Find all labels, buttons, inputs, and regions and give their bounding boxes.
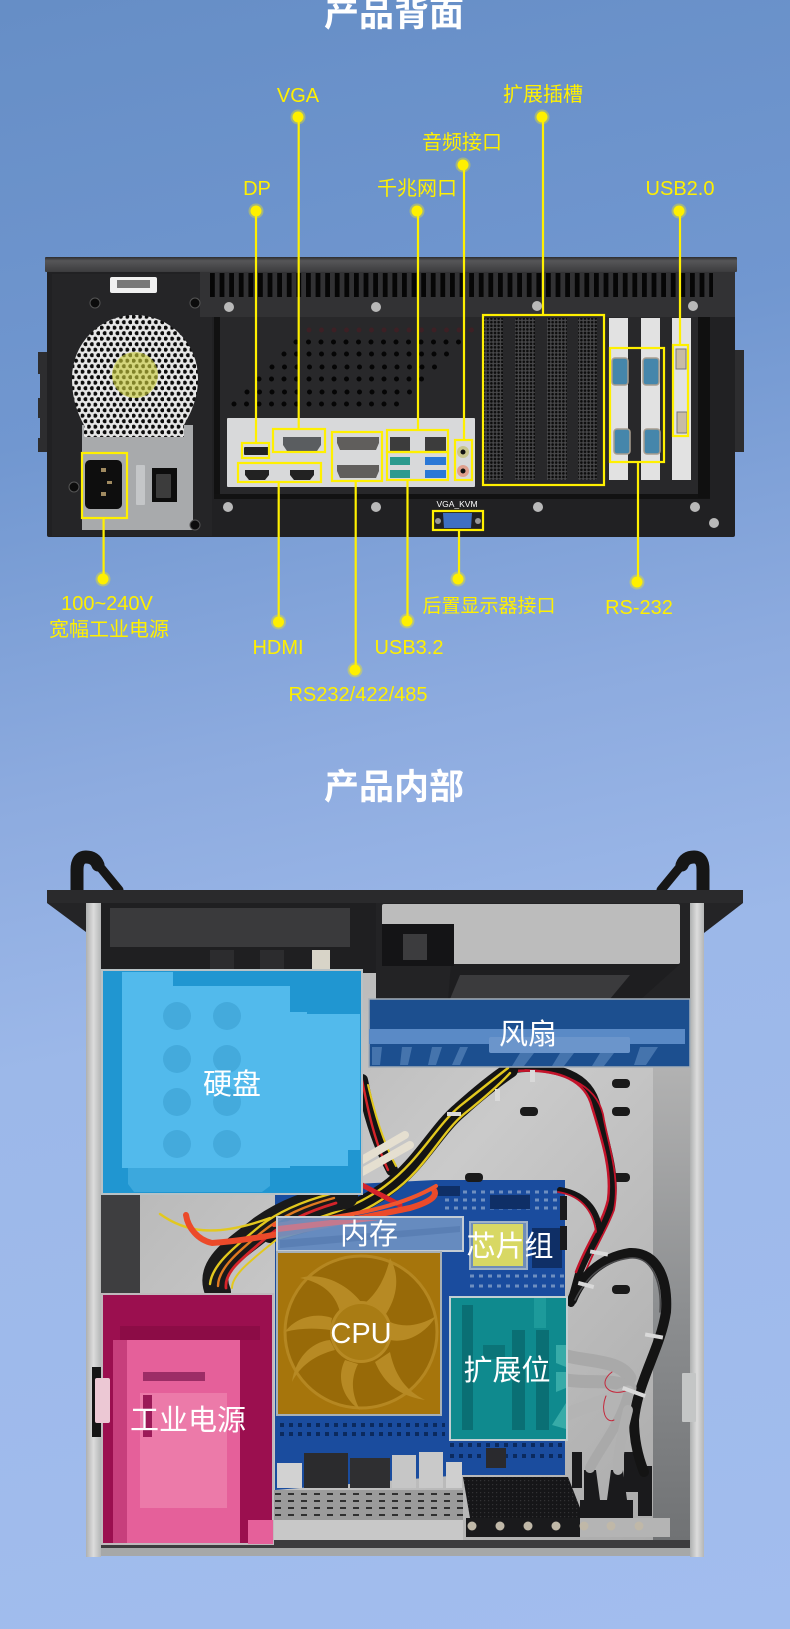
panel: chassis rear photo	[38, 257, 744, 537]
sata ports	[560, 1196, 567, 1250]
overlay: fan	[369, 999, 690, 1067]
io ports	[244, 437, 469, 480]
front silver module and heatsink	[382, 904, 680, 1000]
callout: USB2.0	[646, 178, 714, 436]
clips	[92, 1367, 696, 1437]
serial sticker	[110, 277, 157, 293]
callout: RS-232: RS-232	[605, 597, 673, 619]
hard disk label: 硬盘	[203, 1068, 261, 1101]
zip ties	[447, 1070, 663, 1398]
callout: VGA: VGA	[277, 85, 320, 107]
motherboard io connectors	[277, 1452, 462, 1488]
fan grille and psu plate	[72, 315, 198, 530]
black loop cable	[572, 1253, 666, 1472]
rack handles	[77, 857, 703, 892]
chipset label: 芯片组	[466, 1230, 554, 1263]
full range tag	[136, 465, 145, 505]
callout: USB3.2: USB3.2	[375, 637, 443, 659]
callout: gigabit ethernet: 千兆网口	[377, 177, 457, 200]
front bezel module	[110, 908, 350, 970]
rack ears	[47, 903, 86, 932]
overlay: expansion	[450, 1297, 567, 1440]
ribbon cables	[567, 1356, 630, 1378]
motherboard	[275, 1180, 565, 1490]
overlay: industrial power supply	[95, 1294, 273, 1544]
chassis screws	[223, 301, 719, 528]
overlay: hard disk	[102, 970, 362, 1194]
cross bar	[47, 890, 743, 903]
power inlet	[85, 460, 122, 509]
overlay: chipset	[466, 1222, 554, 1269]
callout: HDMI: HDMI	[252, 637, 304, 659]
usb 2.0 ports	[676, 349, 687, 433]
callout: rear monitor port	[422, 511, 556, 617]
callout: USB2.0: USB2.0	[646, 178, 714, 200]
chassis body	[47, 270, 735, 537]
callout: DP: DP	[243, 178, 271, 200]
power switch	[152, 468, 177, 502]
callout: RS-232	[605, 348, 673, 619]
standoffs	[465, 1079, 630, 1294]
callout: audio: 音频接口	[422, 131, 502, 154]
callout: HDMI	[238, 463, 321, 659]
cable connectors	[572, 1452, 652, 1518]
power supply label: 工业电源	[130, 1404, 246, 1437]
vent slots	[210, 273, 713, 297]
panel: chassis interior photo	[47, 857, 743, 1557]
rear plate	[273, 1490, 463, 1540]
serial ports	[612, 358, 660, 454]
callout: audio	[422, 131, 502, 480]
callout: expansion slots	[483, 83, 604, 485]
side brackets	[38, 352, 47, 452]
callout: DP	[242, 178, 271, 458]
expansion brackets	[463, 1477, 670, 1537]
callout: RS232/422/485	[288, 432, 428, 706]
perforation dots	[234, 330, 476, 404]
expansion label: 扩展位	[463, 1354, 551, 1387]
callout: RS232/422/485: RS232/422/485	[288, 684, 428, 706]
callout: gigabit ethernet	[377, 177, 457, 452]
callout: power: 宽幅工业电源	[49, 618, 169, 641]
right side panel	[653, 1060, 690, 1550]
callout: VGA	[273, 85, 325, 452]
power harness cables	[160, 1068, 666, 1472]
callout: power	[49, 453, 169, 641]
overlay: CPU	[277, 1252, 441, 1415]
fan label: 风扇	[499, 1018, 557, 1051]
chassis floor	[101, 903, 690, 1553]
side rails	[86, 903, 101, 1557]
kvm vga port: VGA_KVM	[436, 499, 478, 509]
top flange	[45, 257, 737, 272]
expansion slot covers	[484, 318, 597, 480]
rear io opening	[214, 317, 710, 498]
white brackets	[609, 318, 691, 480]
rear edge	[101, 1540, 690, 1556]
memory label: 内存	[340, 1218, 398, 1251]
callout: expansion slots: 扩展插槽	[503, 83, 583, 106]
io shield	[227, 418, 475, 487]
overlay: memory	[277, 1217, 463, 1251]
CPU label: CPU	[330, 1318, 392, 1350]
callout: rear monitor port: 后置显示器接口	[422, 595, 556, 617]
callout: USB3.2	[375, 452, 448, 659]
kvm vga port	[435, 499, 481, 528]
callout: power: 100~240V	[61, 593, 154, 615]
title: product interior: 产品内部	[324, 768, 464, 807]
